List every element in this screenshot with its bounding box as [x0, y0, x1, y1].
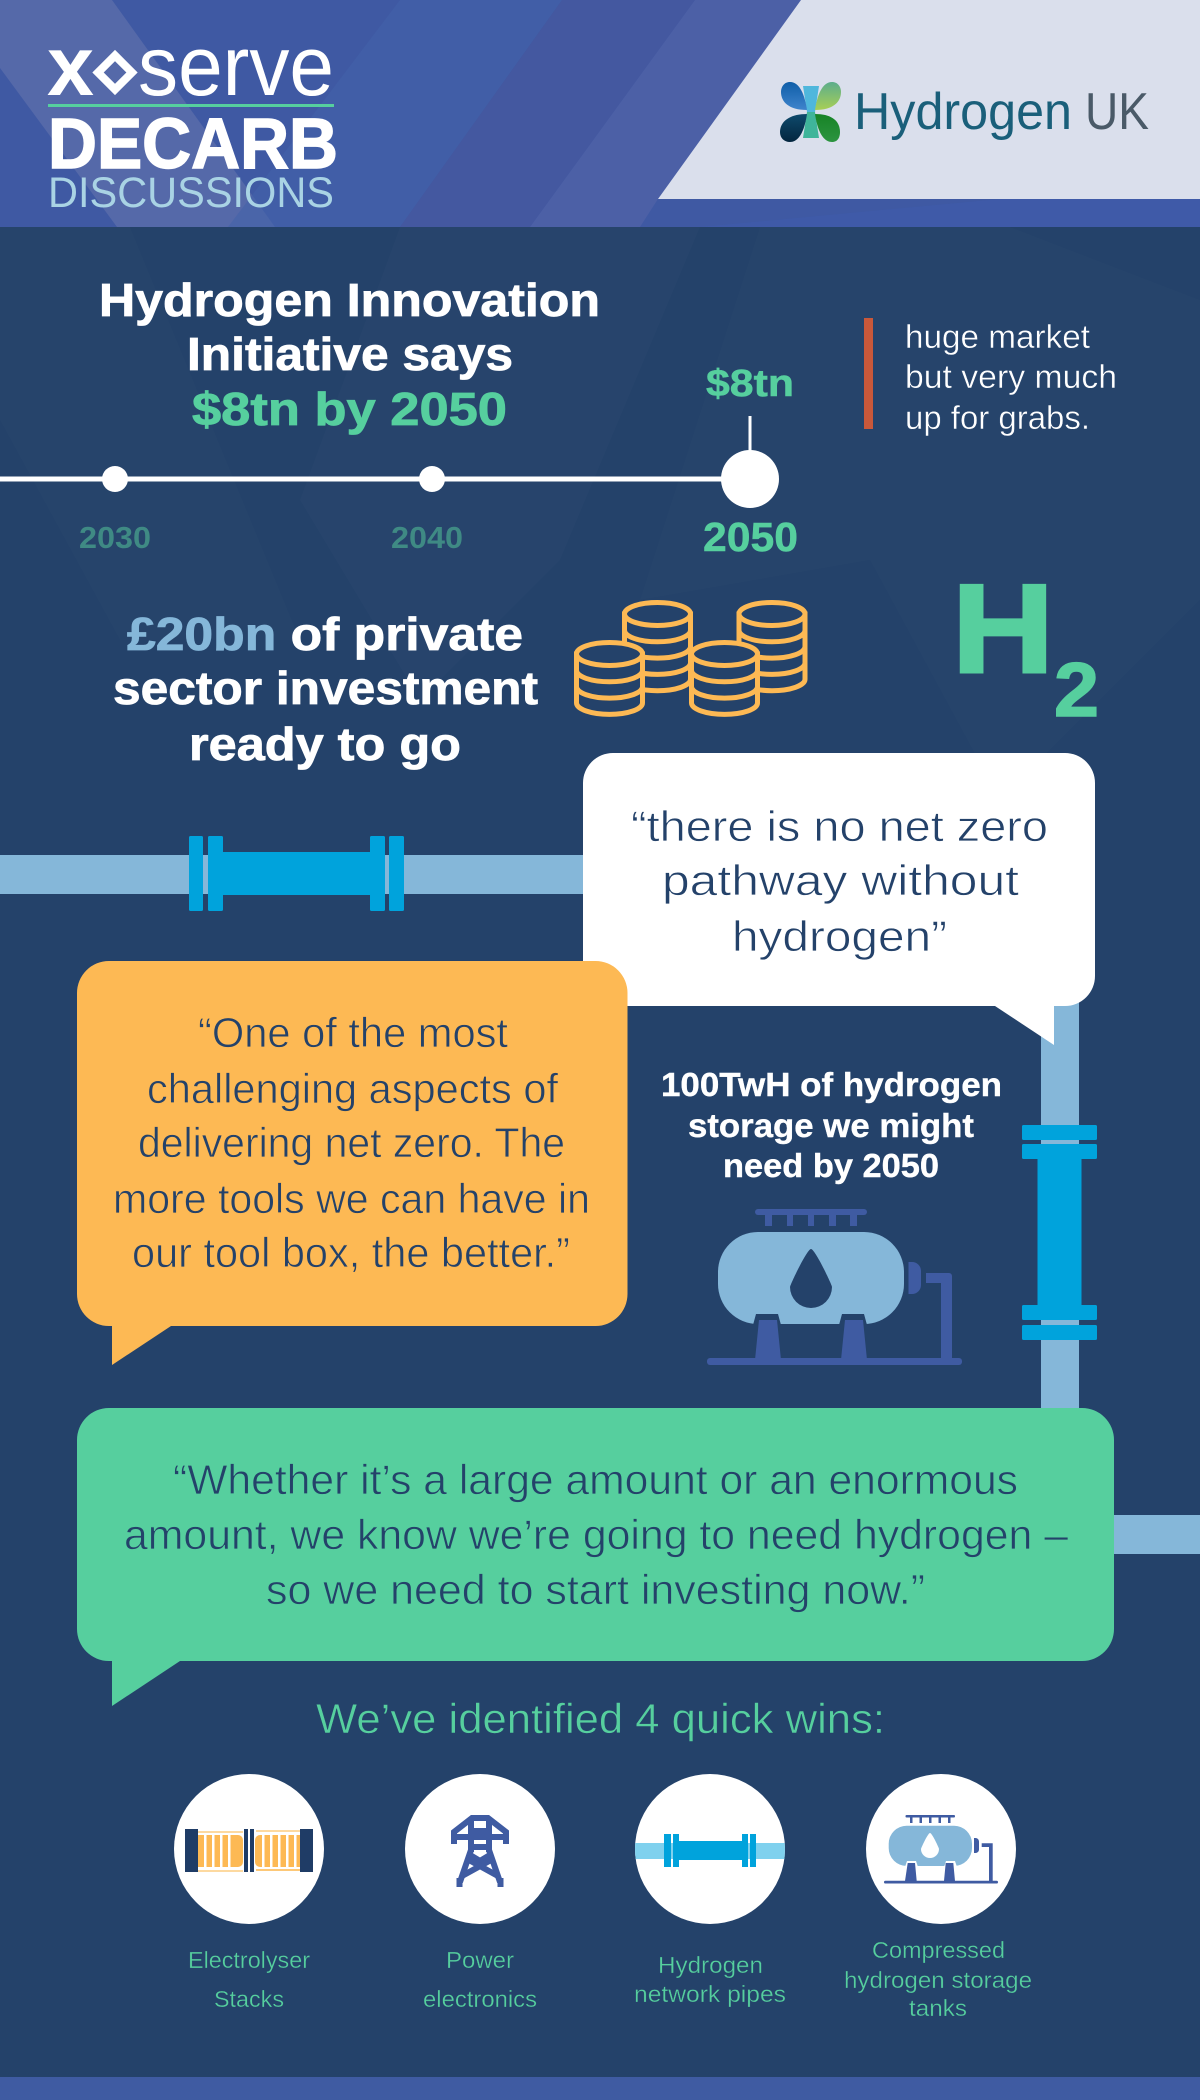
label: electrolyser stacks: Electrolyser	[188, 1947, 310, 1973]
H2 symbol	[952, 558, 1099, 733]
H2 symbol: 2	[1054, 648, 1099, 733]
pipe connector: vertical	[1022, 1125, 1097, 1340]
speech bubble: white quote: hydrogen”	[732, 913, 947, 961]
text block: 100TwH storage: need by 2050	[723, 1147, 939, 1184]
timeline chart	[0, 363, 798, 560]
H2 symbol: H	[952, 558, 1054, 699]
label: compressed hydrogen storage tanks: tanks	[909, 1995, 967, 2021]
label: power electronics	[423, 1947, 537, 2012]
text block: private sector investment: sector investment	[113, 662, 538, 714]
title: Initiative says	[187, 328, 513, 380]
callout: huge market: huge market	[905, 318, 1090, 355]
callout: huge market: up for grabs.	[905, 399, 1090, 436]
speech bubble: green quote: so we need to start investing now.”	[266, 1566, 925, 1613]
heading: DISCUSSIONS: DISCUSSIONS	[48, 169, 334, 217]
heading: quick wins: We’ve identified 4 quick wins:	[316, 1695, 885, 1742]
icon: small storage tank	[866, 1774, 1016, 1924]
label: hydrogen network pipes: Hydrogen	[658, 1952, 763, 1978]
speech bubble: white quote	[583, 753, 1095, 1045]
label: power electronics: Power	[446, 1947, 514, 1973]
footer band	[0, 2077, 1200, 2100]
label: power electronics: electronics	[423, 1986, 537, 2012]
xoserve logo: serve	[138, 19, 334, 113]
label: hydrogen network pipes	[634, 1952, 786, 2007]
label: electrolyser stacks: Stacks	[214, 1986, 284, 2012]
pipe: horizontal upper	[0, 855, 590, 894]
speech bubble: orange quote: delivering net zero. The	[138, 1119, 565, 1166]
text block: private sector investment: £20bn of private	[127, 608, 523, 660]
timeline chart: 2040	[391, 520, 463, 555]
header band	[0, 0, 1200, 227]
icon: storage tank	[707, 1209, 962, 1365]
title: Hydrogen Innovation	[99, 274, 600, 326]
timeline chart: 2050	[703, 514, 798, 560]
speech bubble: orange quote	[77, 961, 628, 1365]
text block: 100TwH storage: 100TwH of hydrogen	[661, 1066, 1002, 1103]
pipe: vertical	[1041, 1000, 1079, 1420]
heading: DECARB: DECARB	[48, 105, 338, 184]
speech bubble: green quote: “Whether it’s a large amount or an enormous	[173, 1456, 1018, 1503]
speech bubble: orange quote: our tool box, the better.”	[132, 1229, 570, 1276]
pipe: horizontal right	[1100, 1515, 1200, 1554]
text block: private sector investment	[113, 608, 538, 770]
icon: pylon	[405, 1774, 555, 1924]
label: compressed hydrogen storage tanks	[844, 1937, 1032, 2021]
speech bubble: orange quote: more tools we can have in	[113, 1175, 590, 1222]
icon: electrolyser stacks	[174, 1774, 324, 1924]
title: $8tn by 2050	[192, 383, 507, 435]
xoserve logo	[47, 19, 334, 113]
green rule	[48, 104, 334, 107]
icon: coin stacks	[576, 602, 805, 714]
title	[99, 274, 600, 435]
label: compressed hydrogen storage tanks: hydrogen storage	[844, 1967, 1032, 1993]
pipe connector: horizontal	[189, 836, 404, 911]
label: electrolyser stacks	[188, 1947, 310, 2012]
callout: huge market: but very much	[905, 358, 1117, 395]
timeline chart: 2030	[79, 520, 151, 555]
label: hydrogen network pipes: network pipes	[634, 1981, 786, 2007]
logo wordmark: UK	[1085, 83, 1149, 141]
speech bubble: orange quote: challenging aspects of	[147, 1065, 558, 1112]
icon: hydrogen pipe	[635, 1774, 785, 1924]
Hydrogen UK logo	[780, 82, 1149, 142]
speech bubble: green quote	[77, 1408, 1114, 1706]
timeline chart: $8tn	[706, 363, 794, 405]
xoserve logo: x	[47, 19, 94, 113]
speech bubble: green quote: amount, we know we’re going to need hydrogen –	[124, 1511, 1069, 1558]
callout: huge market	[864, 318, 1117, 436]
speech bubble: white quote: “there is no net zero	[631, 803, 1048, 851]
speech bubble: orange quote: “One of the most	[198, 1009, 508, 1056]
header light panel	[658, 0, 1200, 199]
label: compressed hydrogen storage tanks: Compressed	[872, 1937, 1005, 1963]
text block: 100TwH storage	[661, 1066, 1002, 1184]
text block: private sector investment: ready to go	[189, 718, 461, 770]
speech bubble: white quote: pathway without	[662, 857, 1019, 905]
icon: Hydrogen UK mark	[780, 82, 841, 142]
logo wordmark: Hydrogen	[854, 83, 1072, 141]
text block: 100TwH storage: storage we might	[688, 1107, 974, 1144]
